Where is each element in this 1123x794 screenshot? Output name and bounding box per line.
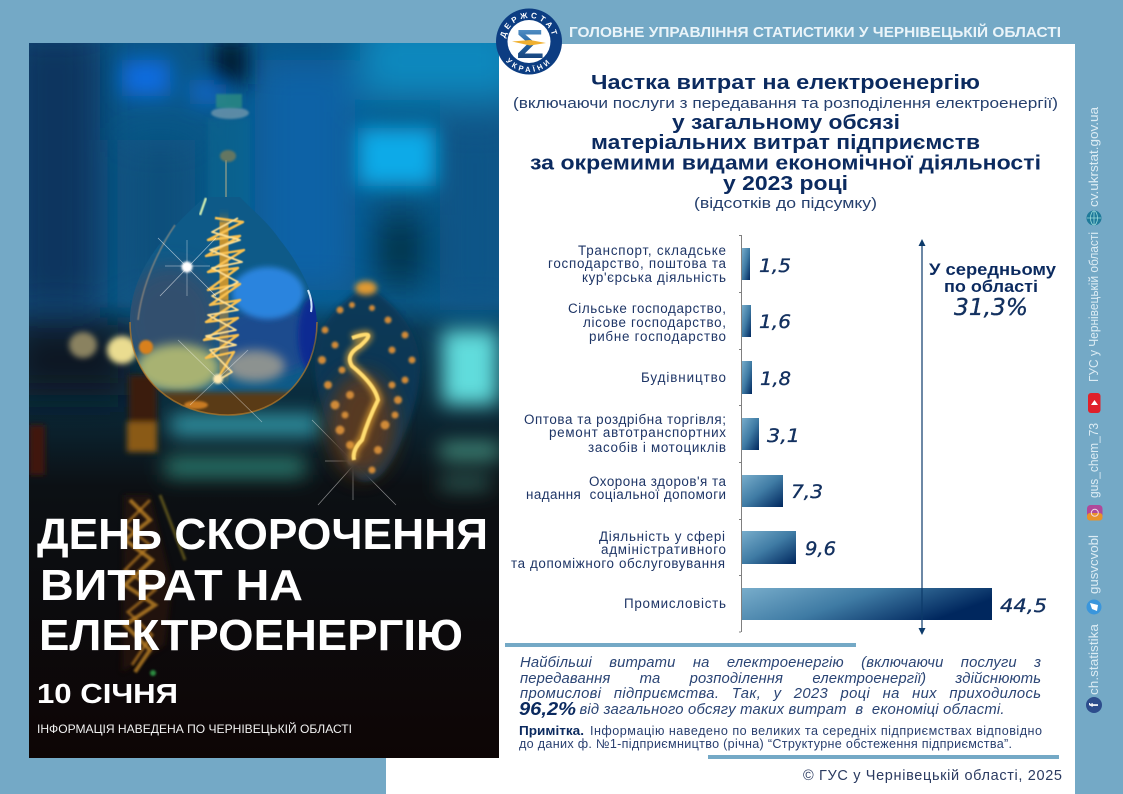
- commentary text: 96,2%: [519, 699, 576, 719]
- bar: construction 1.8: [641, 361, 791, 394]
- sparkle highlights: [158, 238, 396, 505]
- bar: agriculture 1.6: лісове господарство,: [583, 315, 726, 330]
- headline: ВИТРАТ НА: [40, 561, 303, 610]
- bar: administrative 9.6: Діяльність у сфері: [599, 529, 725, 544]
- photo: glowing light bulbs: [29, 43, 499, 758]
- bar: agriculture 1.6: 1,6: [759, 311, 791, 333]
- arrow: regional average marker: [918, 239, 926, 635]
- bar: administrative 9.6: адміністративного: [601, 542, 726, 557]
- bar: trade 3.1: [524, 412, 800, 455]
- commentary text: промислові підприємства. Так, у 2023 році на них приходилось: [520, 686, 1041, 702]
- chart title: (відсотків до підсумку): [694, 196, 877, 212]
- bar: transport 1.5: господарство, поштова та: [548, 256, 727, 271]
- bar: transport 1.5: 1,5: [759, 255, 791, 277]
- icon: instagram: [1087, 505, 1102, 520]
- chart title: матеріальних витрат підприємств: [591, 131, 980, 154]
- bar: agriculture 1.6: Сільське господарство,: [568, 301, 726, 316]
- bar: trade 3.1: ремонт автотранспортних: [549, 425, 726, 440]
- bar: trade 3.1: засобів і мотоциклів: [588, 440, 726, 455]
- rule above commentary: [505, 643, 856, 647]
- bar: construction 1.8: 1,8: [760, 368, 791, 390]
- regional scope note: ІНФОРМАЦІЯ НАВЕДЕНА ПО ЧЕРНІВЕЦЬКІЙ ОБЛАСТІ: [37, 721, 352, 736]
- chart title: у 2023 році: [723, 172, 848, 195]
- date: 10 СІЧНЯ: [37, 678, 178, 709]
- headline: ДЕНЬ СКОРОЧЕННЯ: [37, 510, 488, 559]
- commentary text: від загального обсягу таких витрат в економіці області.: [580, 702, 1004, 718]
- bar: trade 3.1: Оптова та роздрібна торгівля;: [524, 412, 726, 427]
- bar: industry 44.5: Промисловість: [624, 596, 726, 611]
- icon: facebook: f: [1087, 702, 1101, 707]
- neck of the main bulb: [210, 93, 250, 197]
- bar: health 7.3: [526, 474, 823, 507]
- headline: [37, 510, 488, 660]
- chart title: (включаючи послуги з передавання та розподілення електроенергії): [513, 96, 1058, 112]
- bar: transport 1.5: [548, 243, 791, 285]
- callout: regional average: 31,3%: [954, 295, 1028, 321]
- callout: regional average: У середньому: [929, 260, 1057, 279]
- sidebar: contacts: [1086, 107, 1102, 713]
- rule below note: [708, 755, 1059, 759]
- bar: administrative 9.6: [511, 529, 836, 571]
- bar: agriculture 1.6: рибне господарство: [589, 329, 726, 344]
- bar: administrative 9.6: 9,6: [805, 538, 836, 560]
- chart title: за окремими видами економічної діяльності: [530, 152, 1041, 174]
- twitter account: gusvcvobl: [1087, 535, 1101, 594]
- instagram account: gus_chem_73: [1087, 423, 1101, 498]
- callout: regional average: по області: [944, 277, 1038, 296]
- icon: twitter: [1086, 600, 1102, 614]
- bar: industry 44.5: [624, 588, 1047, 620]
- bar chart: [511, 235, 1047, 632]
- note: Примітка.: [519, 723, 584, 738]
- main bulb glass: [129, 197, 318, 416]
- youtube channel: ГУС у Чернівецькій області: [1087, 232, 1101, 382]
- commentary text: [519, 655, 1041, 719]
- header: organisation name: ГОЛОВНЕ УПРАВЛІННЯ СТАТИСТИКИ У ЧЕРНІВЕЦЬКІЙ ОБЛАСТІ: [569, 23, 1061, 41]
- bar: transport 1.5: Транспорт, складське: [578, 243, 726, 258]
- bar: transport 1.5: кур'єрська діяльність: [582, 270, 726, 285]
- bar: health 7.3: 7,3: [791, 481, 823, 503]
- filament of the main bulb: [204, 218, 244, 378]
- second bulb: [315, 281, 420, 481]
- axis: [739, 235, 742, 632]
- website: cv.ukrstat.gov.ua: [1087, 107, 1101, 207]
- commentary text: Найбільші витрати на електроенергію (включаючи послуги з: [520, 655, 1041, 671]
- logo: Derzhstat emblem: [496, 8, 562, 74]
- logo: Derzhstat emblem: УКРАЇНИ: [506, 58, 550, 72]
- white content panel: [386, 44, 1075, 794]
- icon: globe: [1086, 210, 1102, 226]
- callout: regional average: [929, 260, 1057, 321]
- bar: health 7.3: надання соціальної допомоги: [526, 487, 726, 502]
- commentary text: передавання та розподілення електроенергії) здійснюють: [520, 671, 1041, 687]
- bar: construction 1.8: Будівництво: [641, 370, 726, 385]
- note: Інформацію наведено по великих та середніх підприємствах відповідно: [590, 724, 1042, 738]
- logo: Derzhstat emblem: ДЕРЖСТАТ: [500, 12, 558, 39]
- bar: trade 3.1: 3,1: [767, 425, 800, 447]
- headline: ЕЛЕКТРОЕНЕРГІЮ: [39, 611, 463, 660]
- chart title: Частка витрат на електроенергію: [591, 71, 980, 94]
- copyright: © ГУС у Чернівецькій області, 2025: [803, 768, 1062, 784]
- icon: youtube: [1088, 393, 1100, 413]
- note: до даних ф. №1-підприємництво (річна) “Структурне обстеження підприємства”.: [519, 737, 1012, 751]
- bar: administrative 9.6: та допоміжного обслуговування: [511, 556, 725, 571]
- facebook account: ch.statistika: [1087, 624, 1101, 695]
- bar: agriculture 1.6: [568, 301, 791, 344]
- bar: health 7.3: Охорона здоров'я та: [589, 474, 727, 489]
- chart title: [513, 71, 1058, 212]
- dim bulb behind the headline: [122, 495, 185, 676]
- bar: industry 44.5: 44,5: [1000, 595, 1047, 617]
- note: [519, 723, 1042, 751]
- chart title: у загальному обсязі: [672, 111, 900, 134]
- icon: facebook: [1086, 697, 1102, 713]
- logo: Derzhstat emblem: Σ: [516, 21, 544, 67]
